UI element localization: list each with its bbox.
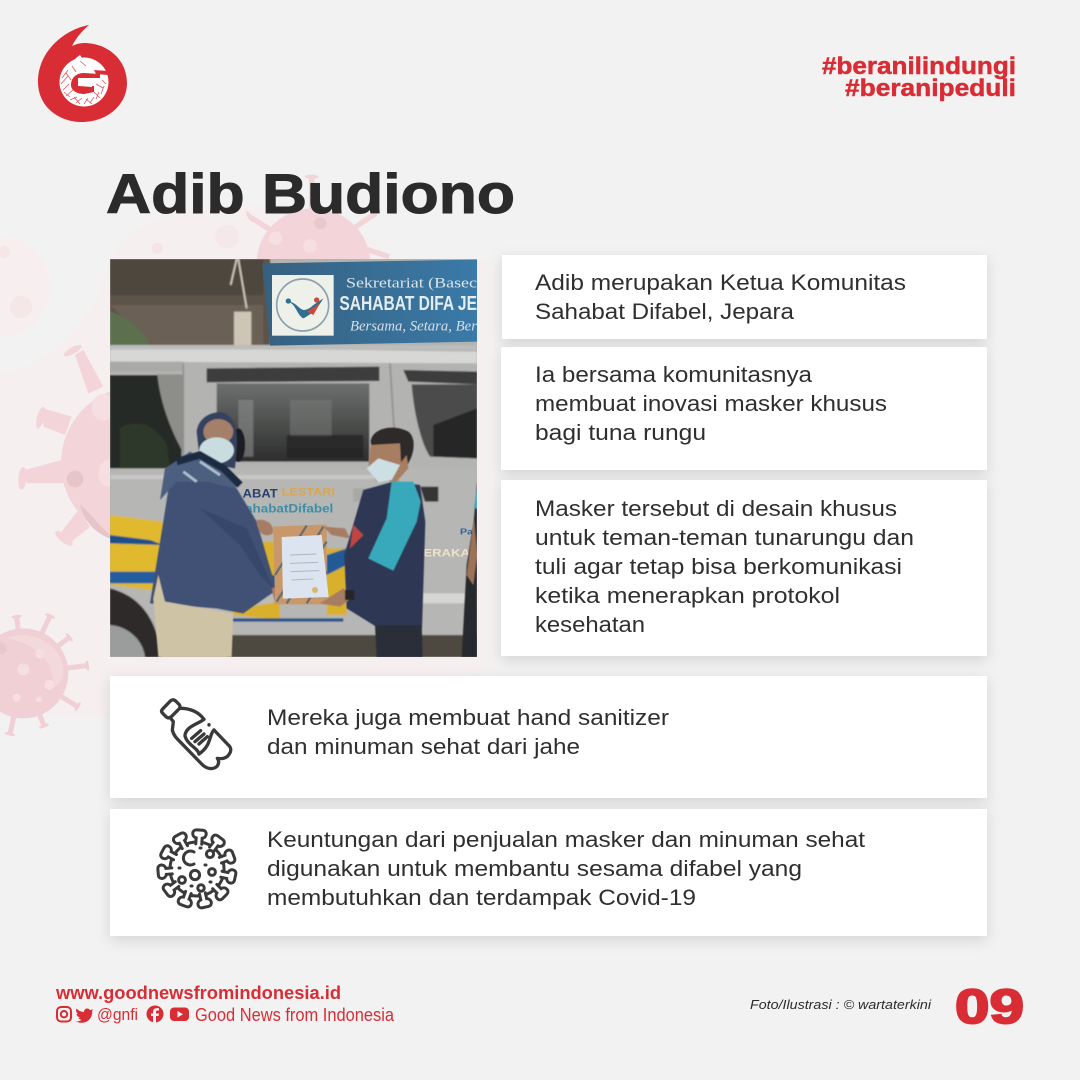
icon: twitter [76, 1008, 93, 1023]
hashtags: #beranipeduli [845, 75, 1016, 102]
photo van lettering: LESTARI [282, 487, 335, 499]
hashtags: #beranilindungi [822, 53, 1016, 80]
photo signboard: Bersama, Setara, Ber [350, 319, 477, 335]
card 5: membutuhkan dan terdampak Covid-19 [267, 885, 696, 910]
card 5 [110, 809, 987, 936]
photo van lettering [243, 486, 477, 560]
background: pale virus circle top left [0, 237, 50, 337]
card 2 [501, 347, 987, 470]
card 5: Keuntungan dari penjualan masker dan minuman sehat [267, 827, 865, 852]
background: small virus bottom left [0, 612, 90, 737]
photo background building [110, 259, 270, 349]
photo woman [150, 412, 282, 657]
background: pale pink blob [0, 205, 490, 718]
photo signboard: SAHABAT DIFA JE [339, 292, 477, 315]
card 4 [110, 676, 987, 798]
icon: virus [158, 830, 237, 909]
photo document [273, 524, 329, 604]
card 5: digunakan untuk membantu sesama difabel yang [267, 856, 802, 881]
icon: bottle [162, 700, 231, 769]
photo windows [110, 345, 477, 468]
card 4: Mereka juga membuat hand sanitizer [267, 705, 669, 730]
lower body stripes [110, 515, 163, 592]
card 3 [501, 480, 987, 656]
footer: website and social: Good News from Indonesia [195, 1005, 395, 1025]
card 3: untuk teman-teman tunarungu dan [535, 525, 914, 550]
footer: website and social: @gnfi [97, 1006, 138, 1024]
photo man [320, 428, 477, 657]
background: large virus left [17, 343, 216, 548]
background: virus behind title [152, 175, 389, 318]
card 3: ketika menerapkan protokol [535, 583, 840, 608]
card 1 [502, 255, 987, 339]
photo credit: Foto/Ilustrasi : © wartaterkini [750, 997, 932, 1012]
photo signboard: Sekretariat (Basec [346, 276, 477, 292]
footer: website and social: www.goodnewsfromindonesia.id [55, 982, 341, 1003]
card 3: kesehatan [535, 612, 645, 637]
footer: website and social [55, 982, 395, 1025]
page number: 09 [955, 981, 1024, 1034]
card 4: dan minuman sehat dari jahe [267, 734, 580, 759]
photo van body [110, 347, 477, 657]
card 3: Masker tersebut di desain khusus [535, 496, 897, 521]
title: Adib Budiono [106, 162, 515, 225]
photo: van handover [110, 259, 477, 657]
logo [38, 25, 127, 122]
card 1: Sahabat Difabel, Jepara [535, 299, 795, 324]
card 2: bagi tuna rungu [535, 420, 706, 445]
card 2: Ia bersama komunitasnya [535, 362, 813, 387]
icon: facebook [146, 1006, 164, 1022]
card 3: tuli agar tetap bisa berkomunikasi [535, 554, 902, 579]
logo emblem [60, 55, 108, 106]
photo van lettering: ABAT [243, 486, 278, 500]
bottom shadow and wheel [110, 588, 162, 657]
photo van lettering: ahabatDifabel [245, 501, 333, 515]
card 2: membuat inovasi masker khusus [535, 391, 887, 416]
hashtags [822, 53, 1016, 102]
icon: youtube [170, 1008, 189, 1021]
icon: instagram [57, 1007, 71, 1022]
card 1: Adib merupakan Ketua Komunitas [535, 270, 906, 295]
photo van lettering: ERAKA [423, 548, 470, 560]
photo van lettering: Par [460, 527, 477, 536]
photo signboard [262, 260, 477, 346]
